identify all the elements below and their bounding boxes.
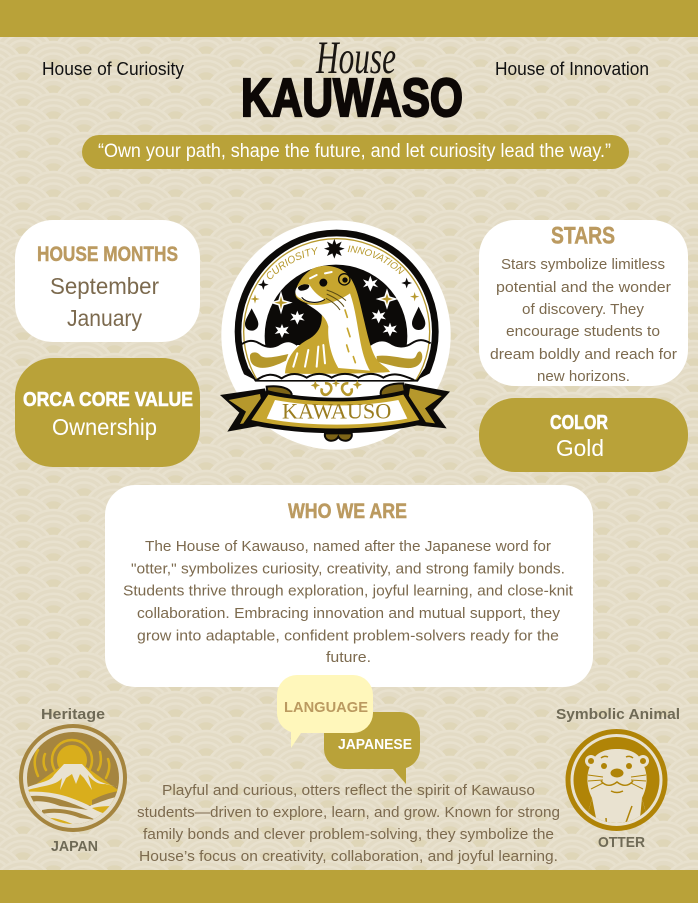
panel: who we are: Students thrive through exploration, joyful learning, and close-knit xyxy=(123,582,574,600)
panel: stars: new horizons. xyxy=(537,368,630,385)
motto pill xyxy=(82,135,629,169)
panel: stars: potential and the wonder xyxy=(496,279,671,296)
panel: house months: September xyxy=(50,273,159,299)
logo: ribbon banner xyxy=(220,388,273,432)
label: OTTER: OTTER xyxy=(598,834,645,851)
panel: house months: January xyxy=(67,305,142,331)
panel: stars: STARS xyxy=(551,222,615,250)
heading: Heritage: Heritage xyxy=(41,706,105,723)
heading: Symbolic Animal: Symbolic Animal xyxy=(556,706,680,723)
panel: who we are: The House of Kawauso, named after the Japanese word for xyxy=(145,538,551,555)
panel: who we are: collaboration. Embracing innovation and mutual support, they xyxy=(137,605,561,622)
panel: who we are: future. xyxy=(326,649,371,666)
text block: otter description: students—driven to explore, learn, and grow. Known for strong xyxy=(137,804,560,821)
logo: banner text: KAWAUSO xyxy=(282,399,391,424)
icon: Japan Mount Fuji badge xyxy=(20,725,126,835)
speech bubble: Language xyxy=(277,675,373,748)
panel: stars: encourage students to xyxy=(506,323,660,340)
title: KAUWASO xyxy=(241,68,463,128)
panel: stars xyxy=(479,220,688,386)
panel: house months xyxy=(15,220,200,342)
label: JAPAN: JAPAN xyxy=(51,838,98,855)
logo ring text: CURIOSITY xyxy=(266,246,318,280)
motto pill: “Own your path, shape the future, and let curiosity lead the way.” xyxy=(98,141,611,162)
emblem: Kawauso otter crest: INNOVATION xyxy=(348,246,405,274)
tagline left: House of Curiosity: House of Curiosity xyxy=(42,59,184,79)
title xyxy=(241,32,463,128)
panel: orca core value: ORCA CORE VALUE xyxy=(23,388,193,411)
text block: otter description xyxy=(137,782,560,865)
panel: orca core value: Ownership xyxy=(52,414,157,440)
logo: otter xyxy=(285,266,390,374)
emblem: Kawauso otter crest xyxy=(220,220,451,450)
text block: otter description: family bonds and clever problem-solving, they symbolize the xyxy=(143,826,554,843)
icon: otter face badge xyxy=(568,732,665,832)
text block: otter description: Playful and curious, otters reflect the spirit of Kawauso xyxy=(162,782,535,799)
panel: house months: HOUSE MONTHS xyxy=(37,243,178,266)
tagline right: House of Innovation: House of Innovation xyxy=(495,59,649,79)
top band xyxy=(0,0,698,37)
speech bubble: Language: LANGUAGE xyxy=(284,699,368,716)
panel: who we are xyxy=(105,485,593,687)
logo: waves xyxy=(250,351,422,368)
title: House xyxy=(315,32,396,84)
speech bubble: Japanese xyxy=(324,712,420,784)
panel: color: Gold xyxy=(556,435,604,461)
panel: stars: Stars symbolize limitless xyxy=(501,256,665,273)
bottom band xyxy=(0,870,698,903)
panel: orca core value xyxy=(15,358,200,467)
text block: otter description: House’s focus on creativity, collaboration, and joyful learning. xyxy=(139,848,558,865)
panel: who we are: WHO WE ARE xyxy=(288,500,407,523)
speech bubble: Japanese: JAPANESE xyxy=(338,737,412,753)
panel: who we are: "otter," symbolizes curiosity, creativity, and strong family bonds. xyxy=(131,560,565,578)
panel: color: COLOR xyxy=(550,411,608,434)
panel: color xyxy=(479,398,688,472)
panel: who we are: grow into adaptable, confident problem-solvers ready for the xyxy=(137,628,559,644)
panel: stars: of discovery. They xyxy=(522,301,644,318)
panel: stars: dream boldly and reach for xyxy=(490,346,677,363)
